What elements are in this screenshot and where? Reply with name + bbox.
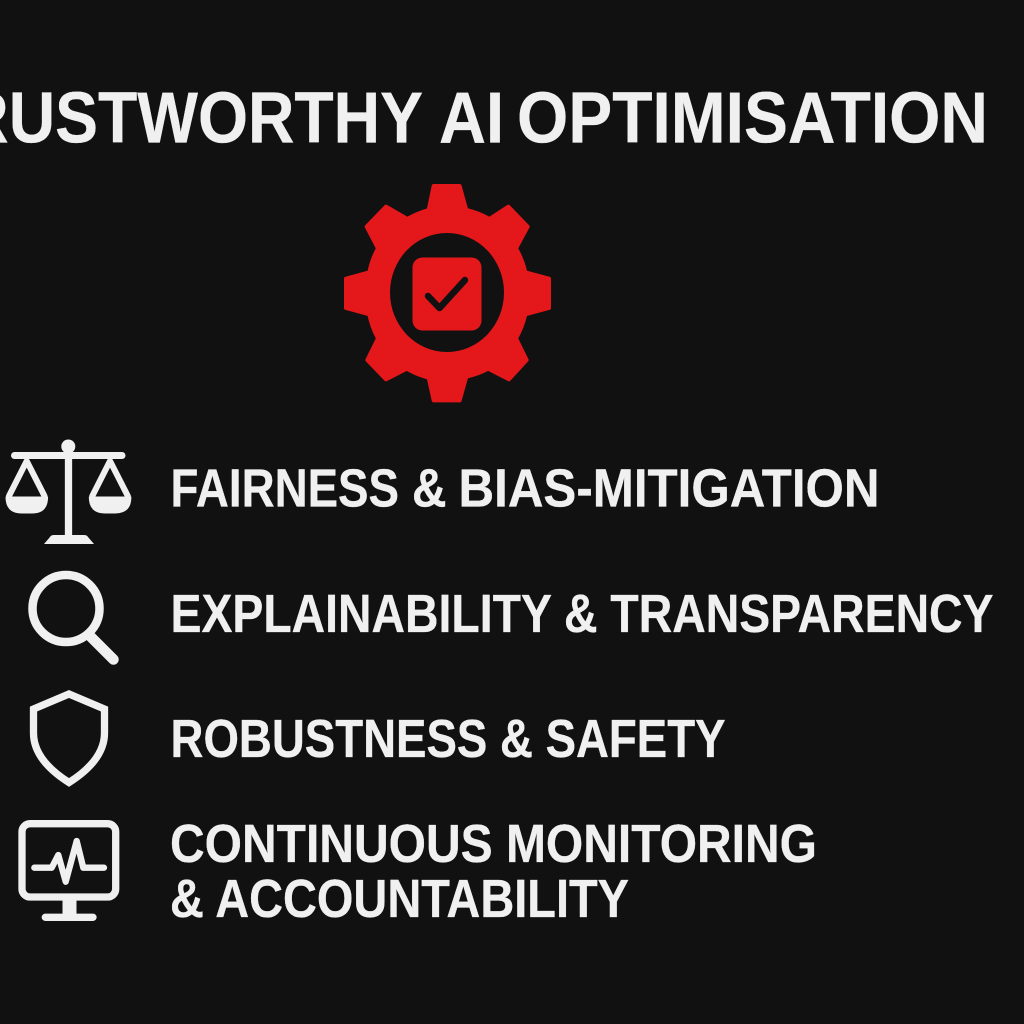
title: OPTIMISATION: [517, 78, 988, 158]
title: AI: [439, 78, 504, 158]
label: fairness: [170, 458, 880, 518]
label: fairness: BIAS-MITIGATION: [458, 458, 880, 518]
icon: shield: [34, 694, 104, 782]
icon: monitor with heartbeat: [22, 824, 116, 917]
title: [0, 78, 988, 158]
label: robustness: ROBUSTNESS & SAFETY: [170, 709, 726, 769]
icon: red gear with checkmark: [346, 186, 549, 400]
label: continuous monitoring: CONTINUOUS MONITORING: [170, 814, 817, 874]
label: fairness: &: [412, 458, 446, 518]
icon: balance scales: [6, 440, 131, 544]
icon: magnifying glass: [32, 575, 114, 660]
label: fairness: FAIRNESS: [170, 458, 399, 518]
label: and accountability: & ACCOUNTABILITY: [170, 869, 629, 929]
